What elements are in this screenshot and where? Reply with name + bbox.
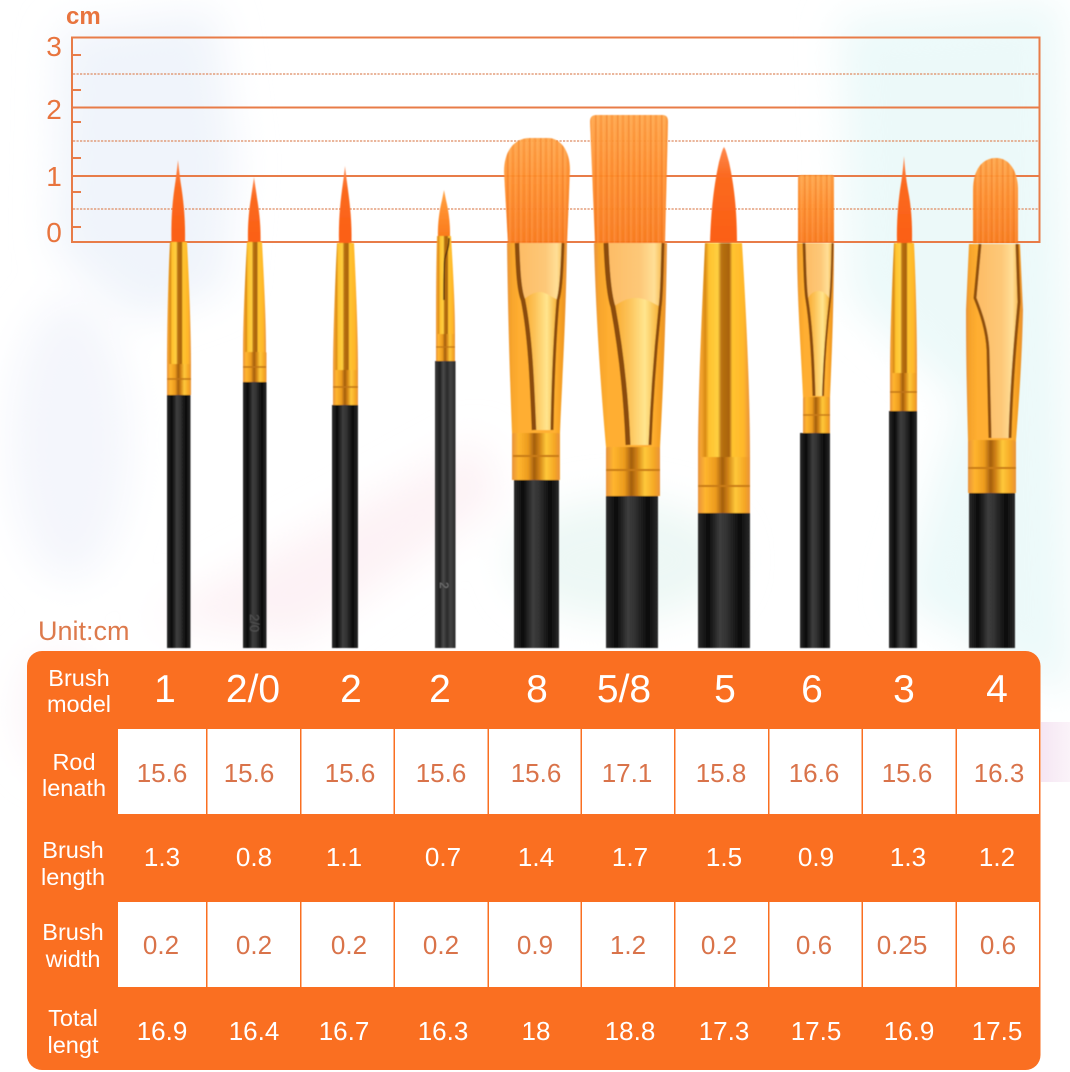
row: brush length: 1.2 [979,842,1015,872]
row: brush width: 0.2 [423,930,459,960]
row: brush model: 2/0 [226,668,280,711]
row labels [41,665,111,1058]
row: total length: 16.3 [418,1016,468,1046]
row: brush model: 4 [986,668,1008,711]
brush 6 flat [797,175,834,648]
row: brush width: 0.6 [796,930,832,960]
row labels: Total [48,1005,98,1031]
row: brush length: 0.9 [798,842,834,872]
table orange background [27,651,1040,1070]
row: brush width: 0.9 [517,930,553,960]
row: rod length: 17.1 [602,758,652,788]
ruler axis numbers: 3 [46,31,62,62]
specification table [27,651,1040,1070]
row: brush length: 1.1 [326,842,362,872]
row: total length: 18.8 [605,1016,655,1046]
row: brush model: 2 [429,668,451,711]
row: brush model: 2 [340,668,362,711]
white row cells: rod length [118,729,1039,814]
row labels: lengt [48,1032,99,1058]
ruler axis numbers [46,31,62,248]
row: brush length [144,842,1015,872]
row: brush length: 1.5 [706,842,742,872]
row: brush length: 1.3 [144,842,180,872]
brush set [167,115,1023,648]
brush 3 round [889,156,917,648]
background: pale watercolor wash [10,0,1070,782]
row: brush width: 0.2 [701,930,737,960]
row: rod length: 16.6 [789,758,839,788]
row: total length: 18 [522,1016,550,1046]
ruler axis numbers: 2 [46,94,62,125]
brush 2 liner: 2 [437,582,451,589]
brush 1 [167,160,191,648]
row: total length: 17.3 [699,1016,749,1046]
white row cells: brush width [118,902,1039,987]
row labels: Rod [52,749,96,775]
row: total length: 16.4 [229,1016,279,1046]
row: brush width: 0.6 [980,930,1016,960]
row: brush width: 0.2 [236,930,272,960]
row: rod length: 15.8 [696,758,746,788]
row: total length: 16.7 [319,1016,369,1046]
brush 2/0 [243,177,266,648]
row: total length: 17.5 [791,1016,841,1046]
brush 2 liner [435,190,456,648]
row: brush model [154,668,1008,711]
row: brush model: 1 [154,668,176,711]
row: brush model: 3 [893,668,915,711]
row: brush width: 1.2 [610,930,646,960]
row: total length: 16.9 [884,1016,934,1046]
row: brush length: 1.3 [890,842,926,872]
row: rod length: 15.6 [224,758,274,788]
ruler grid [72,38,1040,242]
row labels: width [45,946,100,972]
row: rod length: 15.6 [137,758,187,788]
row: rod length: 16.3 [974,758,1024,788]
row: rod length: 15.6 [511,758,561,788]
row: total length: 17.5 [972,1016,1022,1046]
row labels: Brush [42,919,104,945]
row: brush model: 5 [714,668,736,711]
row labels: lenath [42,775,106,801]
row: brush model: 5/8 [597,668,651,711]
brush 8 flat [504,138,570,648]
row: brush length: 0.8 [236,842,272,872]
row: brush width [143,930,1016,960]
row labels: Brush [42,837,104,863]
brush 5 round [698,147,750,648]
row: total length [137,1016,1022,1046]
ruler axis numbers: 0 [46,217,62,248]
row: brush length: 1.4 [518,842,554,872]
row: rod length [137,758,1024,788]
row: brush length: 0.7 [425,842,461,872]
row: rod length: 15.6 [325,758,375,788]
brush 4 filbert [966,158,1023,648]
row: brush length: 1.7 [612,842,648,872]
row: brush width: 0.2 [331,930,367,960]
brush 5/8 flat [590,115,668,648]
ruler axis numbers: 1 [46,161,62,192]
row labels: length [41,864,105,890]
ruler unit label: cm [66,3,101,30]
brush 2/0: 2/0 [247,614,262,632]
row: rod length: 15.6 [416,758,466,788]
row: brush width: 0.2 [143,930,179,960]
row labels: Brush [48,665,110,691]
row: brush width: 0.25 [877,930,927,960]
row: brush model: 8 [526,668,548,711]
row labels: model [47,691,111,717]
unit label: Unit:cm [38,616,130,646]
row: rod length: 15.6 [882,758,932,788]
brush 2 [332,166,358,648]
row: brush model: 6 [801,668,823,711]
row: total length: 16.9 [137,1016,187,1046]
